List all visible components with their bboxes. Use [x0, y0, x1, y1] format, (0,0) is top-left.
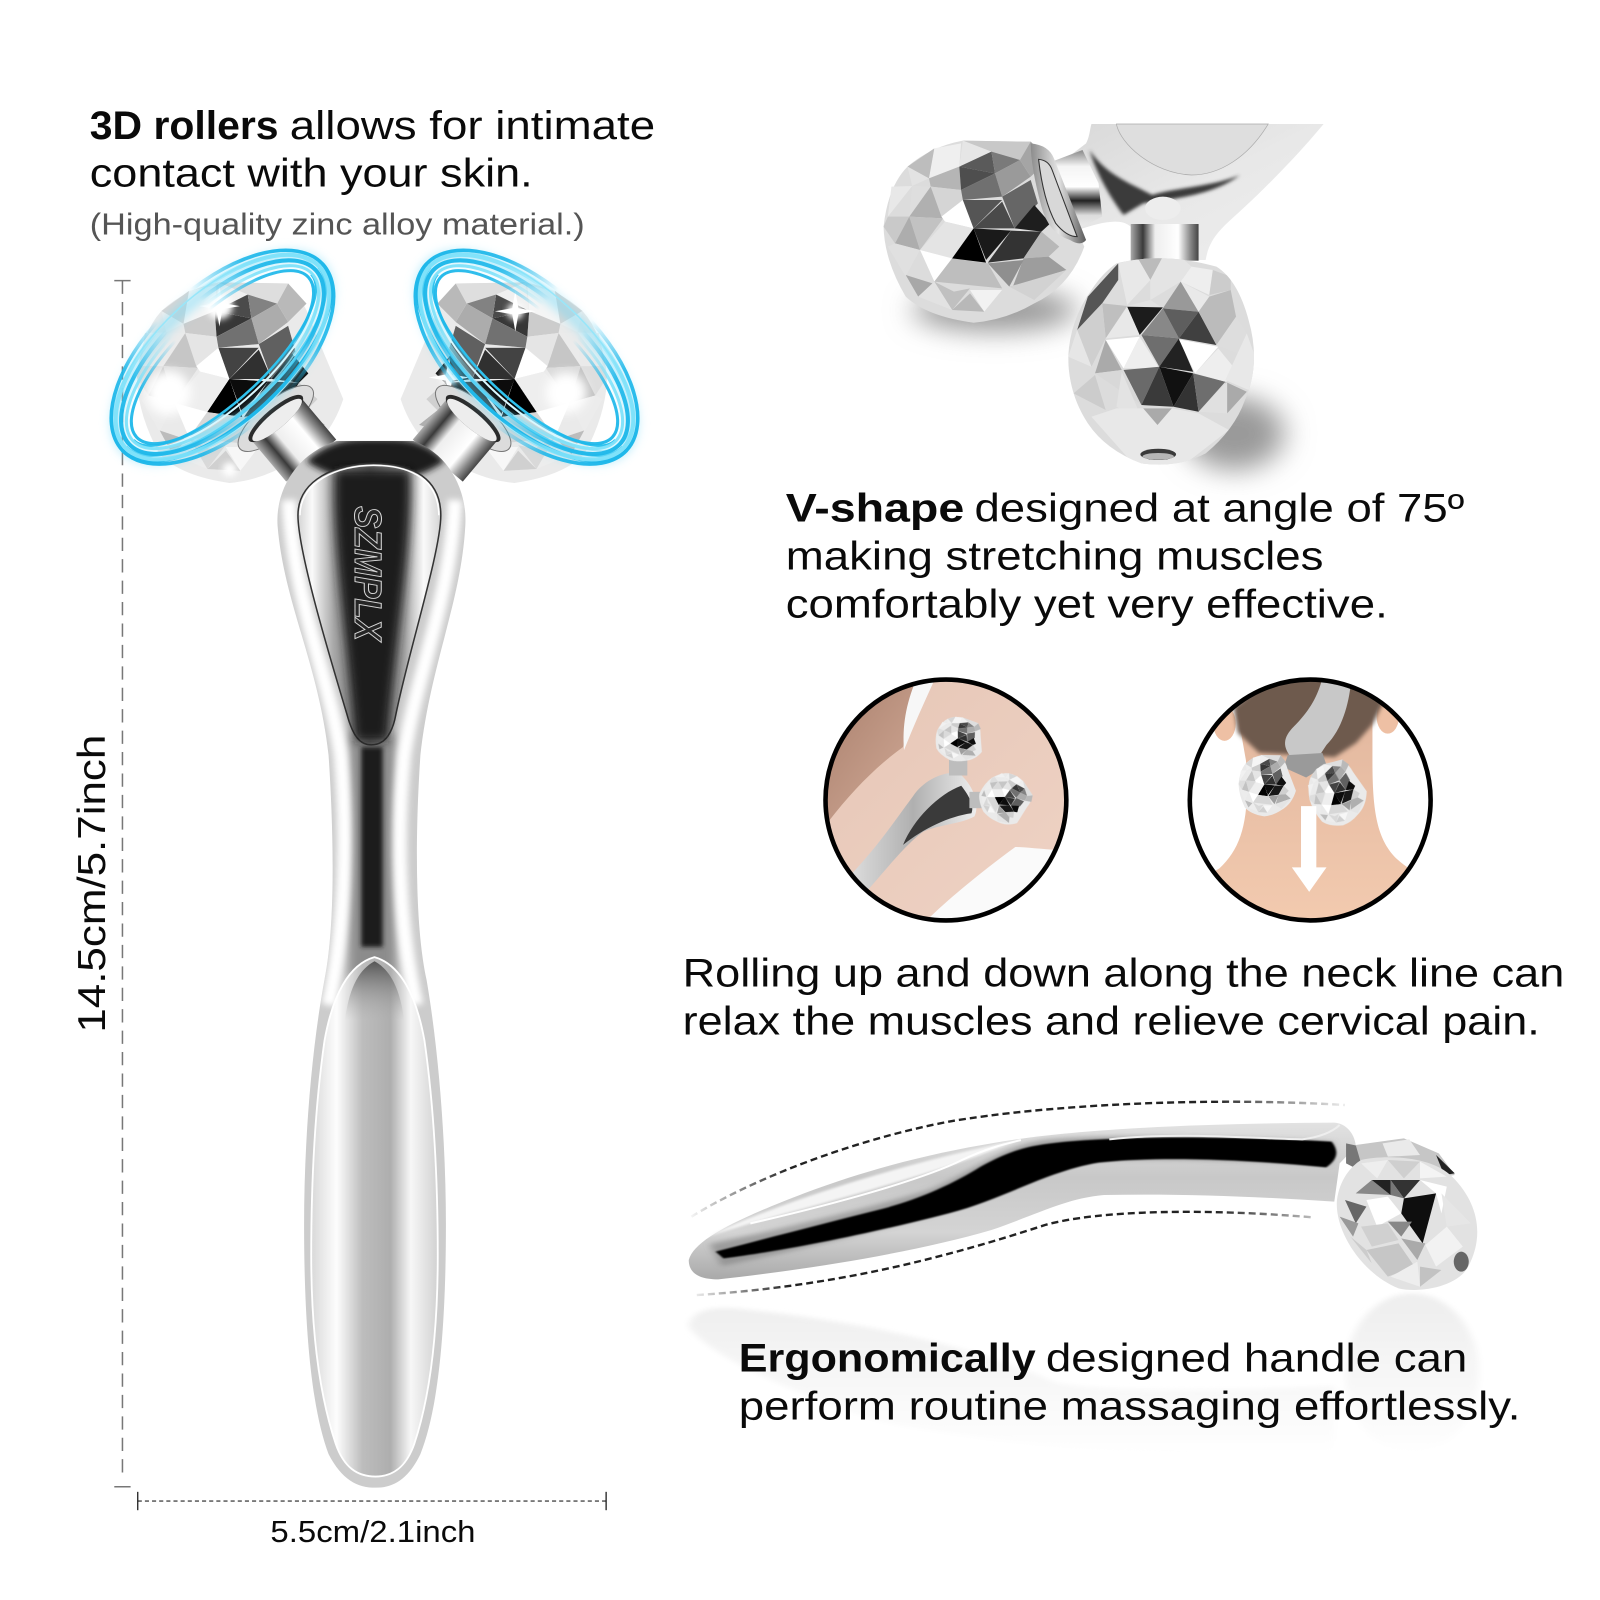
inlay black wedge — [334, 469, 411, 741]
right facet ball — [401, 282, 607, 483]
right neck — [402, 375, 520, 491]
caption: ergonomically designed: designed handle can — [1046, 1336, 1467, 1380]
heading: V-shape: designed at angle of 75º — [974, 486, 1465, 530]
caption: rolling along neck — [683, 952, 1564, 1044]
front ball — [1337, 1157, 1477, 1290]
handle dark inlay — [903, 786, 972, 845]
heading: V-shape: V-shape — [786, 486, 964, 530]
V-shape roller close-up — [884, 124, 1324, 470]
ergonomic side view roller — [689, 1102, 1479, 1463]
inlay highlight line — [300, 465, 439, 515]
shaft mid-gray core — [349, 735, 396, 980]
height dimension line — [114, 281, 131, 1487]
handle reflection — [1090, 150, 1240, 215]
roller handle — [850, 773, 976, 893]
top highlight — [708, 1140, 1018, 1237]
handle body — [689, 1123, 1356, 1279]
side ball — [979, 773, 1033, 824]
main roller product — [137, 282, 607, 1495]
handle silhouette and sheen — [277, 440, 466, 1488]
connector — [1346, 1143, 1377, 1177]
skin background — [830, 682, 1064, 917]
shadowed arm region — [828, 686, 914, 820]
white garment — [930, 847, 1053, 918]
white arrow — [1292, 806, 1327, 892]
caption: ergonomically designed — [739, 1336, 1520, 1428]
heading: 3D rollers: (High-quality zinc alloy material.) — [90, 208, 585, 242]
roller handle — [1285, 682, 1351, 760]
neck and shoulders — [1216, 719, 1408, 918]
brand logo: SZMPLX — [347, 506, 389, 643]
width label: 5.5cm/2.1inch — [270, 1515, 476, 1549]
left blue rotation rings — [74, 212, 371, 503]
ball B — [1068, 258, 1254, 464]
right ear — [1376, 704, 1398, 734]
left neck ball — [1239, 755, 1296, 816]
floor reflection — [689, 1293, 1479, 1463]
heading: 3D rollers: 3D rollers — [90, 104, 279, 148]
caption: rolling along neck: Rolling up and down along the neck line can — [683, 952, 1564, 996]
left neck — [229, 375, 347, 491]
vertical connector — [1131, 224, 1199, 261]
dashed outline bottom — [697, 1212, 1313, 1295]
right highlight — [400, 500, 455, 1005]
heading: V-shape: making stretching muscles — [786, 534, 1323, 578]
sparkles on balls — [146, 286, 587, 477]
circle border — [826, 680, 1066, 920]
heading: 3D rollers: contact with your skin. — [90, 152, 533, 196]
hair — [1234, 673, 1385, 757]
ball A collar — [1031, 143, 1086, 243]
heading: V-shape: comfortably yet very effective. — [786, 582, 1388, 626]
black reflection band — [716, 1138, 1336, 1258]
heading: 3D rollers: allows for intimate — [290, 104, 655, 148]
circle photo: roller on arm — [823, 677, 1069, 923]
shaft dark band — [361, 747, 383, 947]
back ball — [1356, 1138, 1455, 1180]
neck connectors — [949, 759, 983, 808]
upper arm ball — [936, 716, 982, 762]
circle photo: roller on neck — [1188, 677, 1433, 923]
right neck ball — [1308, 760, 1367, 826]
white crease line — [750, 1140, 1021, 1223]
top dark band — [306, 439, 445, 480]
heading: 3D rollers — [90, 104, 655, 242]
left ear — [1214, 711, 1236, 741]
heading: V-shape — [786, 486, 1465, 626]
caption: rolling along neck: relax the muscles and relieve cervical pain. — [683, 1000, 1540, 1044]
handle inlay — [1116, 124, 1268, 175]
soft band shadow — [716, 1148, 1332, 1255]
circle border — [1190, 680, 1431, 920]
horizontal connector — [1043, 150, 1102, 232]
white strap — [904, 682, 934, 750]
drop shadows — [913, 288, 1284, 470]
height label: 14.5cm/5.7inch — [71, 735, 114, 1033]
ball A — [884, 141, 1084, 323]
width dimension line — [138, 1492, 606, 1510]
caption: ergonomically designed: Ergonomically — [739, 1336, 1036, 1380]
left facet ball — [137, 282, 343, 483]
lower inlay top shade — [345, 961, 404, 1020]
lower inlay panel — [311, 957, 438, 1477]
handle body — [1056, 124, 1324, 260]
upper inlay panel — [298, 463, 441, 745]
dashed outline top — [691, 1102, 1345, 1217]
right blue rotation rings — [378, 212, 675, 503]
caption: ergonomically designed: perform routine massaging effortlessly. — [739, 1384, 1520, 1428]
white background — [1184, 673, 1439, 929]
left highlight — [289, 500, 344, 1005]
